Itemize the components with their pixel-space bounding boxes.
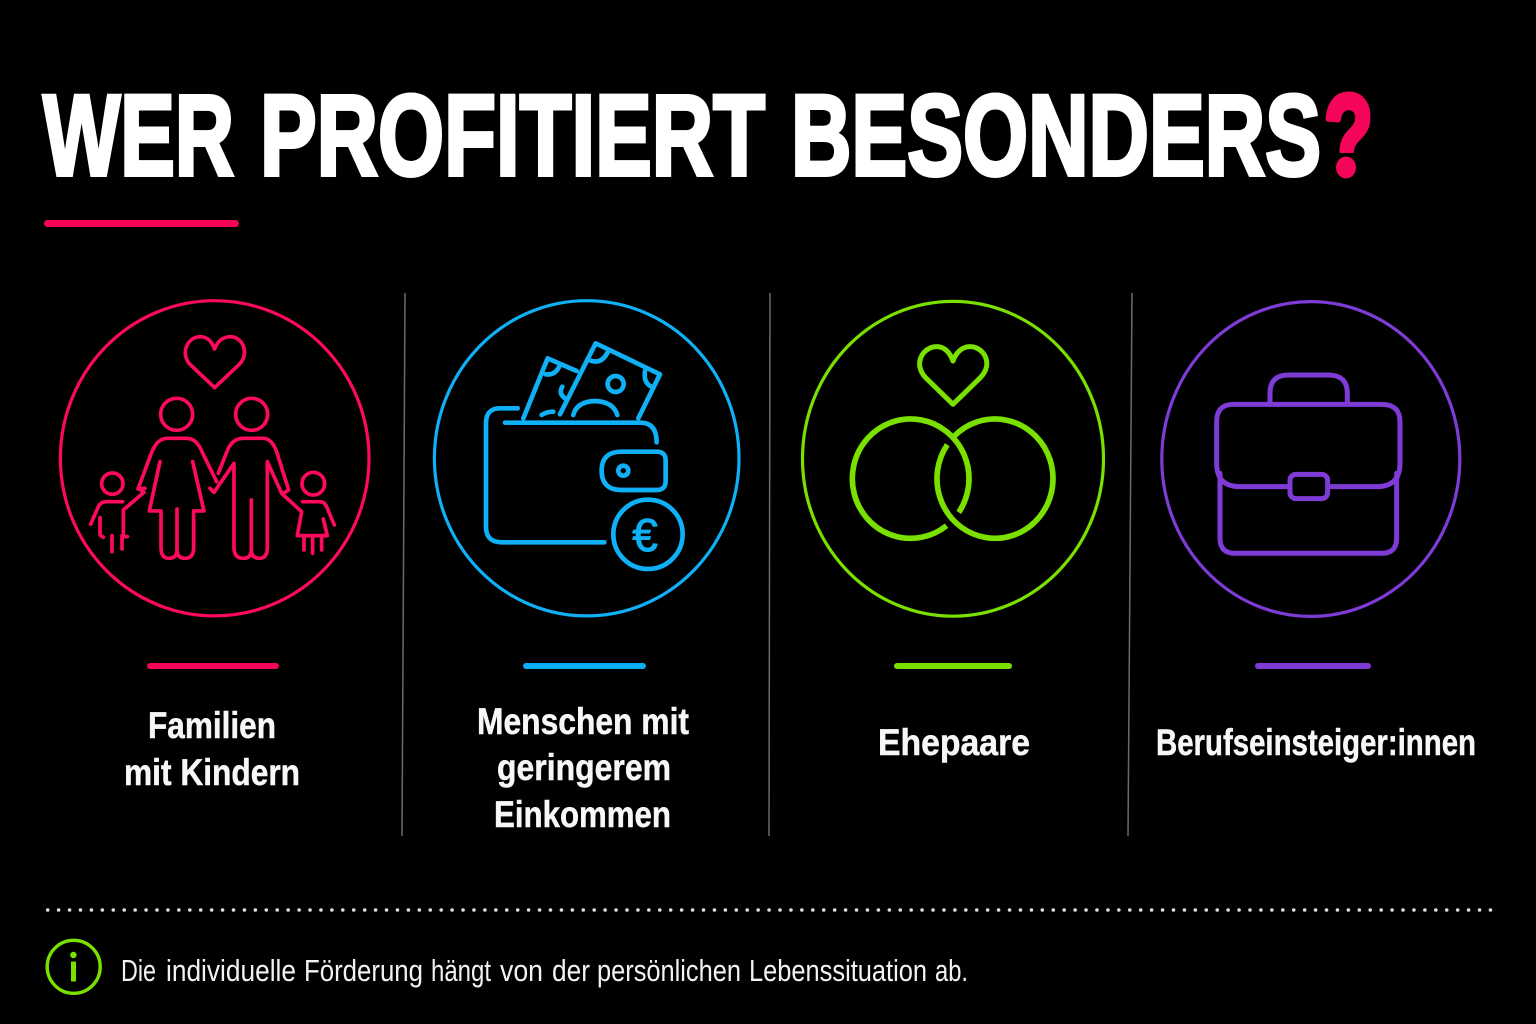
title: BESONDERS <box>791 72 1321 200</box>
label: mit Kindern <box>124 752 300 793</box>
label: Einkommen <box>494 794 671 835</box>
title: ? <box>1324 72 1373 200</box>
footer note: Lebenssituation <box>749 953 927 988</box>
accent bar <box>523 663 646 669</box>
icon: briefcase circle <box>1162 302 1460 616</box>
panel: Berufseinsteiger:innen <box>1156 302 1476 763</box>
icon: wallet with banknotes and euro coin: € <box>632 509 658 561</box>
accent bar <box>147 663 279 669</box>
icon: wallet circle <box>434 301 739 616</box>
footer note: der <box>552 953 590 988</box>
icon: family with heart <box>91 337 334 558</box>
title underline <box>44 220 239 227</box>
icon: briefcase <box>1217 375 1400 553</box>
footer note: persönlichen <box>597 953 741 988</box>
title: PROFITIERT <box>260 72 765 200</box>
footer note: von <box>500 953 543 988</box>
icon: info <box>47 940 100 993</box>
label <box>124 705 300 793</box>
label: Ehepaare <box>878 722 1030 763</box>
footer note <box>121 953 968 988</box>
icon: wedding rings with heart <box>852 347 1053 538</box>
panel: Ehepaare <box>802 301 1104 763</box>
panel: Menschen mit geringerem Einkommen <box>434 301 739 835</box>
title <box>43 72 1373 200</box>
label: geringerem <box>497 747 671 788</box>
footer note: ab. <box>935 953 968 988</box>
footer note: Die <box>121 953 156 988</box>
label: Menschen mit <box>477 701 689 742</box>
footer note: Förderung <box>304 953 423 988</box>
icon: family circle <box>60 301 369 616</box>
panel: Familien mit Kindern <box>60 301 369 793</box>
accent bar <box>894 663 1012 669</box>
accent bar <box>1255 663 1371 669</box>
icon: rings circle <box>802 301 1104 616</box>
footer note: individuelle <box>166 953 296 988</box>
label: Familien <box>148 705 276 746</box>
footer note: hängt <box>431 953 491 988</box>
label <box>477 701 689 835</box>
icon: wallet with banknotes and euro coin <box>486 343 683 569</box>
title: WER <box>43 72 234 200</box>
